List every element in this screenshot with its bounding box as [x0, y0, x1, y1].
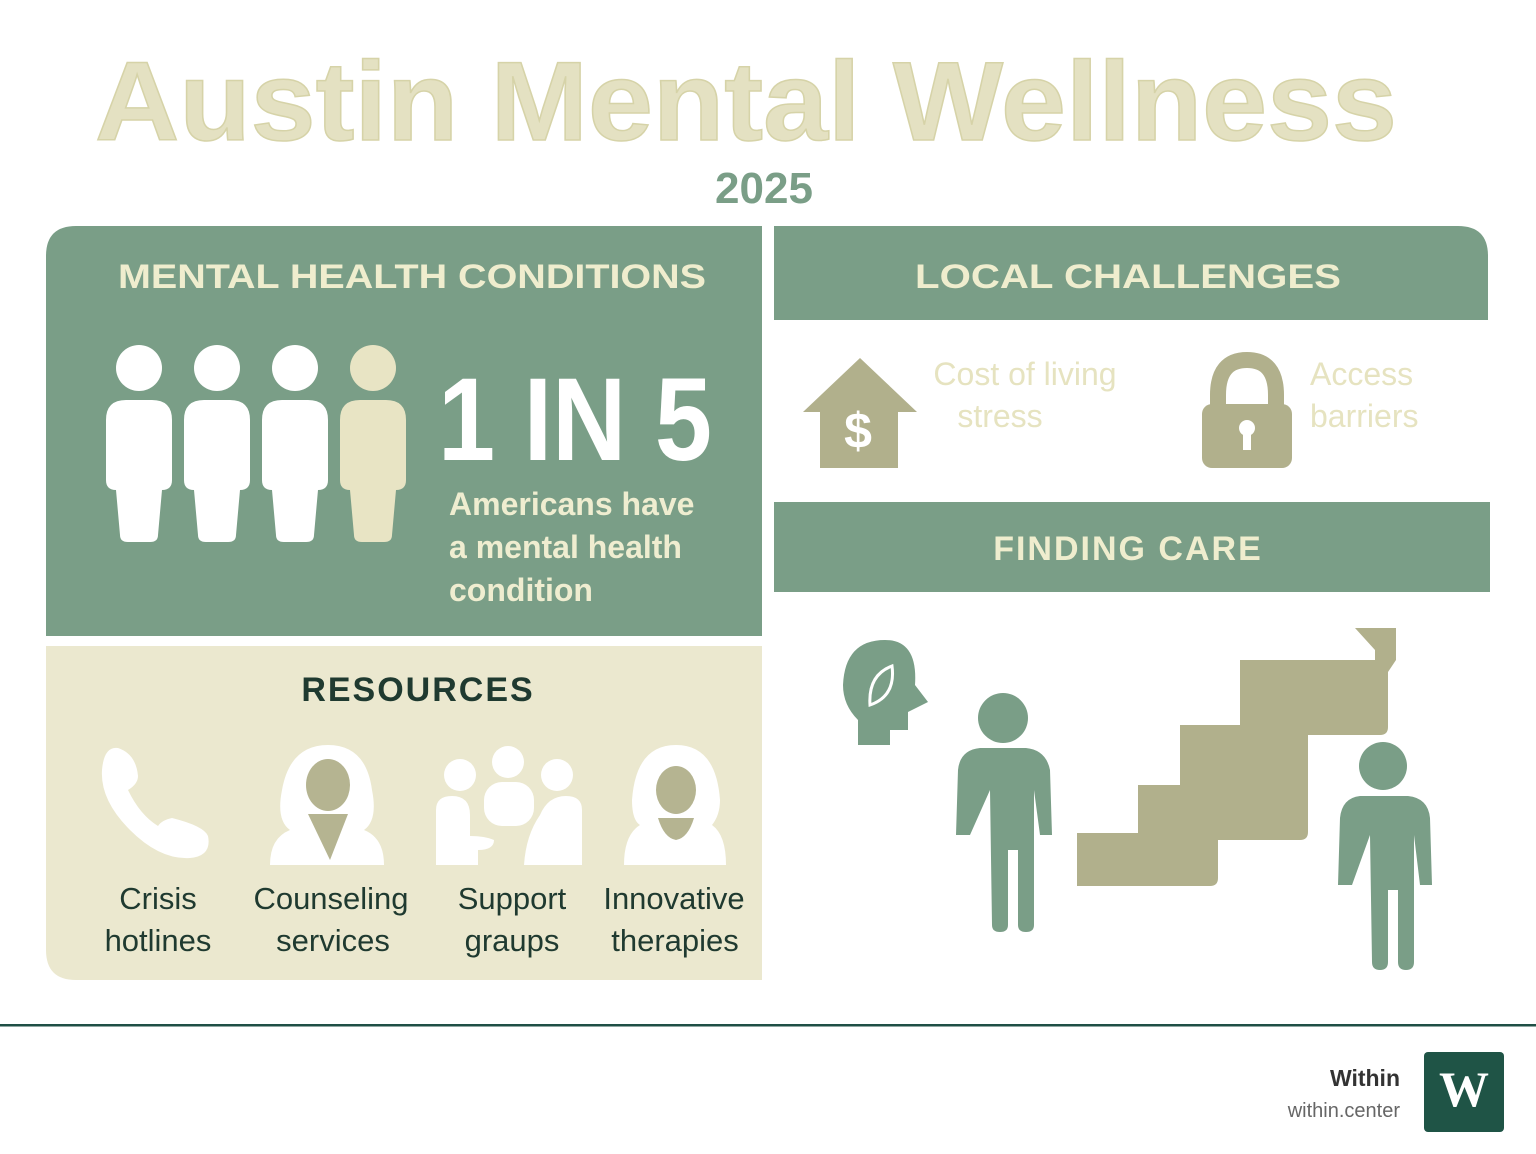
labels: resources: Crisis	[119, 881, 197, 916]
panel: finding care header	[774, 502, 1490, 592]
labels: resources: hotlines	[105, 923, 211, 958]
text: americans have a mental health condition	[449, 486, 694, 608]
labels: resources: Innovative	[603, 881, 745, 916]
panel: local challenges header	[774, 226, 1488, 320]
divider	[0, 1024, 1536, 1026]
panel: resources	[46, 646, 762, 980]
logo: W	[1439, 1061, 1489, 1117]
footer brand text: within.center	[1287, 1100, 1400, 1122]
text: access barriers	[1310, 356, 1418, 434]
icon: house with dollar	[803, 358, 917, 468]
icon: person right	[1338, 742, 1432, 970]
labels: resources: therapies	[611, 923, 739, 958]
text: americans have a mental health condition: a mental health	[449, 529, 682, 565]
panel: finding care header: FINDING CARE	[993, 530, 1263, 568]
text: cost of living stress	[933, 356, 1117, 434]
icon: stairs arrow	[1077, 628, 1396, 886]
panel: mental health conditions	[46, 226, 762, 636]
text: americans have a mental health condition: Americans have	[449, 486, 694, 522]
title: Austin Mental Wellness	[95, 39, 1397, 164]
icon: therapist	[624, 745, 726, 865]
footer brand text: Within	[1330, 1065, 1400, 1091]
icon: support group	[436, 746, 582, 865]
text: cost of living stress: stress	[957, 398, 1043, 434]
labels: resources	[105, 881, 745, 958]
labels: resources: Counseling	[253, 881, 409, 916]
icon: phone	[102, 748, 209, 858]
panel: local challenges header: LOCAL CHALLENGES	[915, 258, 1341, 296]
subtitle year: 2025	[715, 164, 813, 213]
icon: house with dollar: $	[844, 403, 872, 459]
text: cost of living stress: Cost of living	[933, 356, 1117, 392]
icon: lock	[1202, 360, 1292, 468]
logo	[1424, 1052, 1504, 1132]
labels: resources: Support	[458, 881, 567, 916]
text: americans have a mental health condition: condition	[449, 572, 593, 608]
statistic: 1 in 5: 1 IN 5	[438, 354, 712, 486]
icon: person left	[956, 693, 1052, 932]
icon: head with leaf	[843, 640, 928, 745]
text: access barriers: barriers	[1310, 398, 1418, 434]
icon: counselor	[270, 745, 384, 865]
heading: resources: RESOURCES	[301, 671, 535, 709]
icon: people figures	[106, 345, 406, 542]
footer brand text	[1287, 1065, 1400, 1122]
text: access barriers: Access	[1310, 356, 1413, 392]
labels: resources: graups	[465, 923, 559, 958]
heading: mental health conditions: MENTAL HEALTH CONDITIONS	[118, 258, 706, 296]
labels: resources: services	[276, 923, 390, 958]
